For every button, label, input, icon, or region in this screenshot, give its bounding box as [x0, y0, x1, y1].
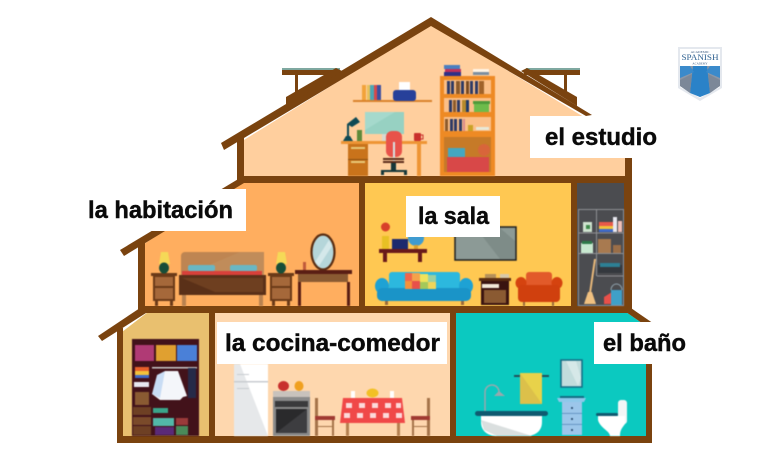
bookcase — [440, 76, 495, 176]
laptop — [392, 239, 408, 249]
left nightstand — [151, 273, 177, 306]
folded clothes — [134, 367, 149, 387]
broom — [584, 259, 596, 304]
right dormer — [521, 68, 580, 106]
first floor roof — [98, 308, 146, 341]
panel: kitchen furniture — [234, 364, 430, 436]
wall console — [379, 249, 427, 262]
label: el estudio: el estudio — [545, 124, 657, 151]
vanity table — [295, 262, 352, 306]
attic room fill — [244, 24, 625, 178]
label: la cocina-comedor — [217, 322, 447, 364]
armchair — [516, 272, 562, 306]
panel: bedroom furniture — [151, 234, 352, 306]
plant and mug — [357, 130, 423, 141]
top books — [444, 65, 489, 76]
logo: Spanish academy shield: ACADEMY — [692, 62, 708, 66]
shelf items — [581, 217, 622, 273]
label: el estudio — [530, 116, 674, 158]
attic walls and floor — [237, 138, 244, 180]
flower vase — [381, 222, 390, 249]
panel: living room furniture — [375, 222, 562, 306]
wardrobe room fill — [122, 312, 210, 437]
dining table — [340, 388, 405, 436]
left dormer — [282, 68, 342, 106]
label: la habitación — [80, 189, 246, 231]
second floor roof — [120, 178, 244, 256]
dustpan and bucket — [604, 284, 622, 305]
storage room fill — [576, 182, 625, 307]
panel: wardrobe — [132, 339, 199, 436]
sofa — [375, 272, 473, 305]
bathroom mirror — [561, 360, 582, 387]
right lamp — [276, 252, 287, 274]
toilet — [596, 400, 627, 436]
main roof — [221, 17, 592, 150]
right nightstand — [268, 273, 294, 306]
bathtub — [475, 411, 548, 436]
wardrobe frame — [132, 339, 199, 436]
panel: house structure — [98, 17, 660, 443]
second floor walls — [138, 180, 632, 313]
bed — [179, 252, 266, 306]
panel: study furniture — [341, 65, 495, 176]
shelving frame — [578, 209, 624, 306]
drawers and boxes — [133, 392, 188, 435]
wall shelf — [353, 100, 432, 102]
globe — [408, 230, 424, 249]
label: el baño — [594, 322, 695, 364]
pots — [278, 381, 304, 391]
panel: storage closet — [578, 209, 624, 306]
label: la cocina-comedor: la cocina-comedor — [225, 330, 440, 357]
hanging shirts — [152, 367, 197, 400]
side table — [479, 274, 511, 305]
kitchen room fill — [214, 312, 450, 437]
panel: bathroom furniture — [475, 360, 627, 436]
storage boxes — [135, 345, 197, 361]
logo: Spanish academy shield: SPANISH — [682, 53, 719, 62]
logo: Spanish academy shield: ACADEMIC — [691, 50, 710, 54]
monitor — [365, 112, 404, 141]
refrigerator — [234, 364, 268, 436]
logo: Spanish academy shield — [678, 47, 722, 101]
living room fill — [365, 182, 572, 307]
label: el baño: el baño — [603, 330, 686, 357]
first floor walls — [117, 312, 652, 443]
left dining chair — [315, 398, 335, 436]
label: la sala — [406, 196, 500, 237]
desk — [341, 141, 427, 176]
shower head — [485, 385, 505, 412]
stove — [273, 391, 310, 436]
office chair — [381, 131, 407, 175]
bathroom room fill — [455, 312, 646, 437]
label: la sala: la sala — [418, 203, 490, 230]
label: la habitación: la habitación — [88, 197, 233, 224]
bedroom room fill — [144, 182, 360, 307]
right dining chair — [411, 398, 430, 436]
desk lamp — [343, 117, 360, 141]
sink cabinet — [557, 396, 586, 435]
printer — [393, 82, 416, 101]
binders — [362, 85, 381, 100]
left lamp — [159, 252, 170, 274]
towel — [514, 373, 549, 404]
television — [455, 227, 516, 260]
oval mirror — [312, 234, 334, 270]
